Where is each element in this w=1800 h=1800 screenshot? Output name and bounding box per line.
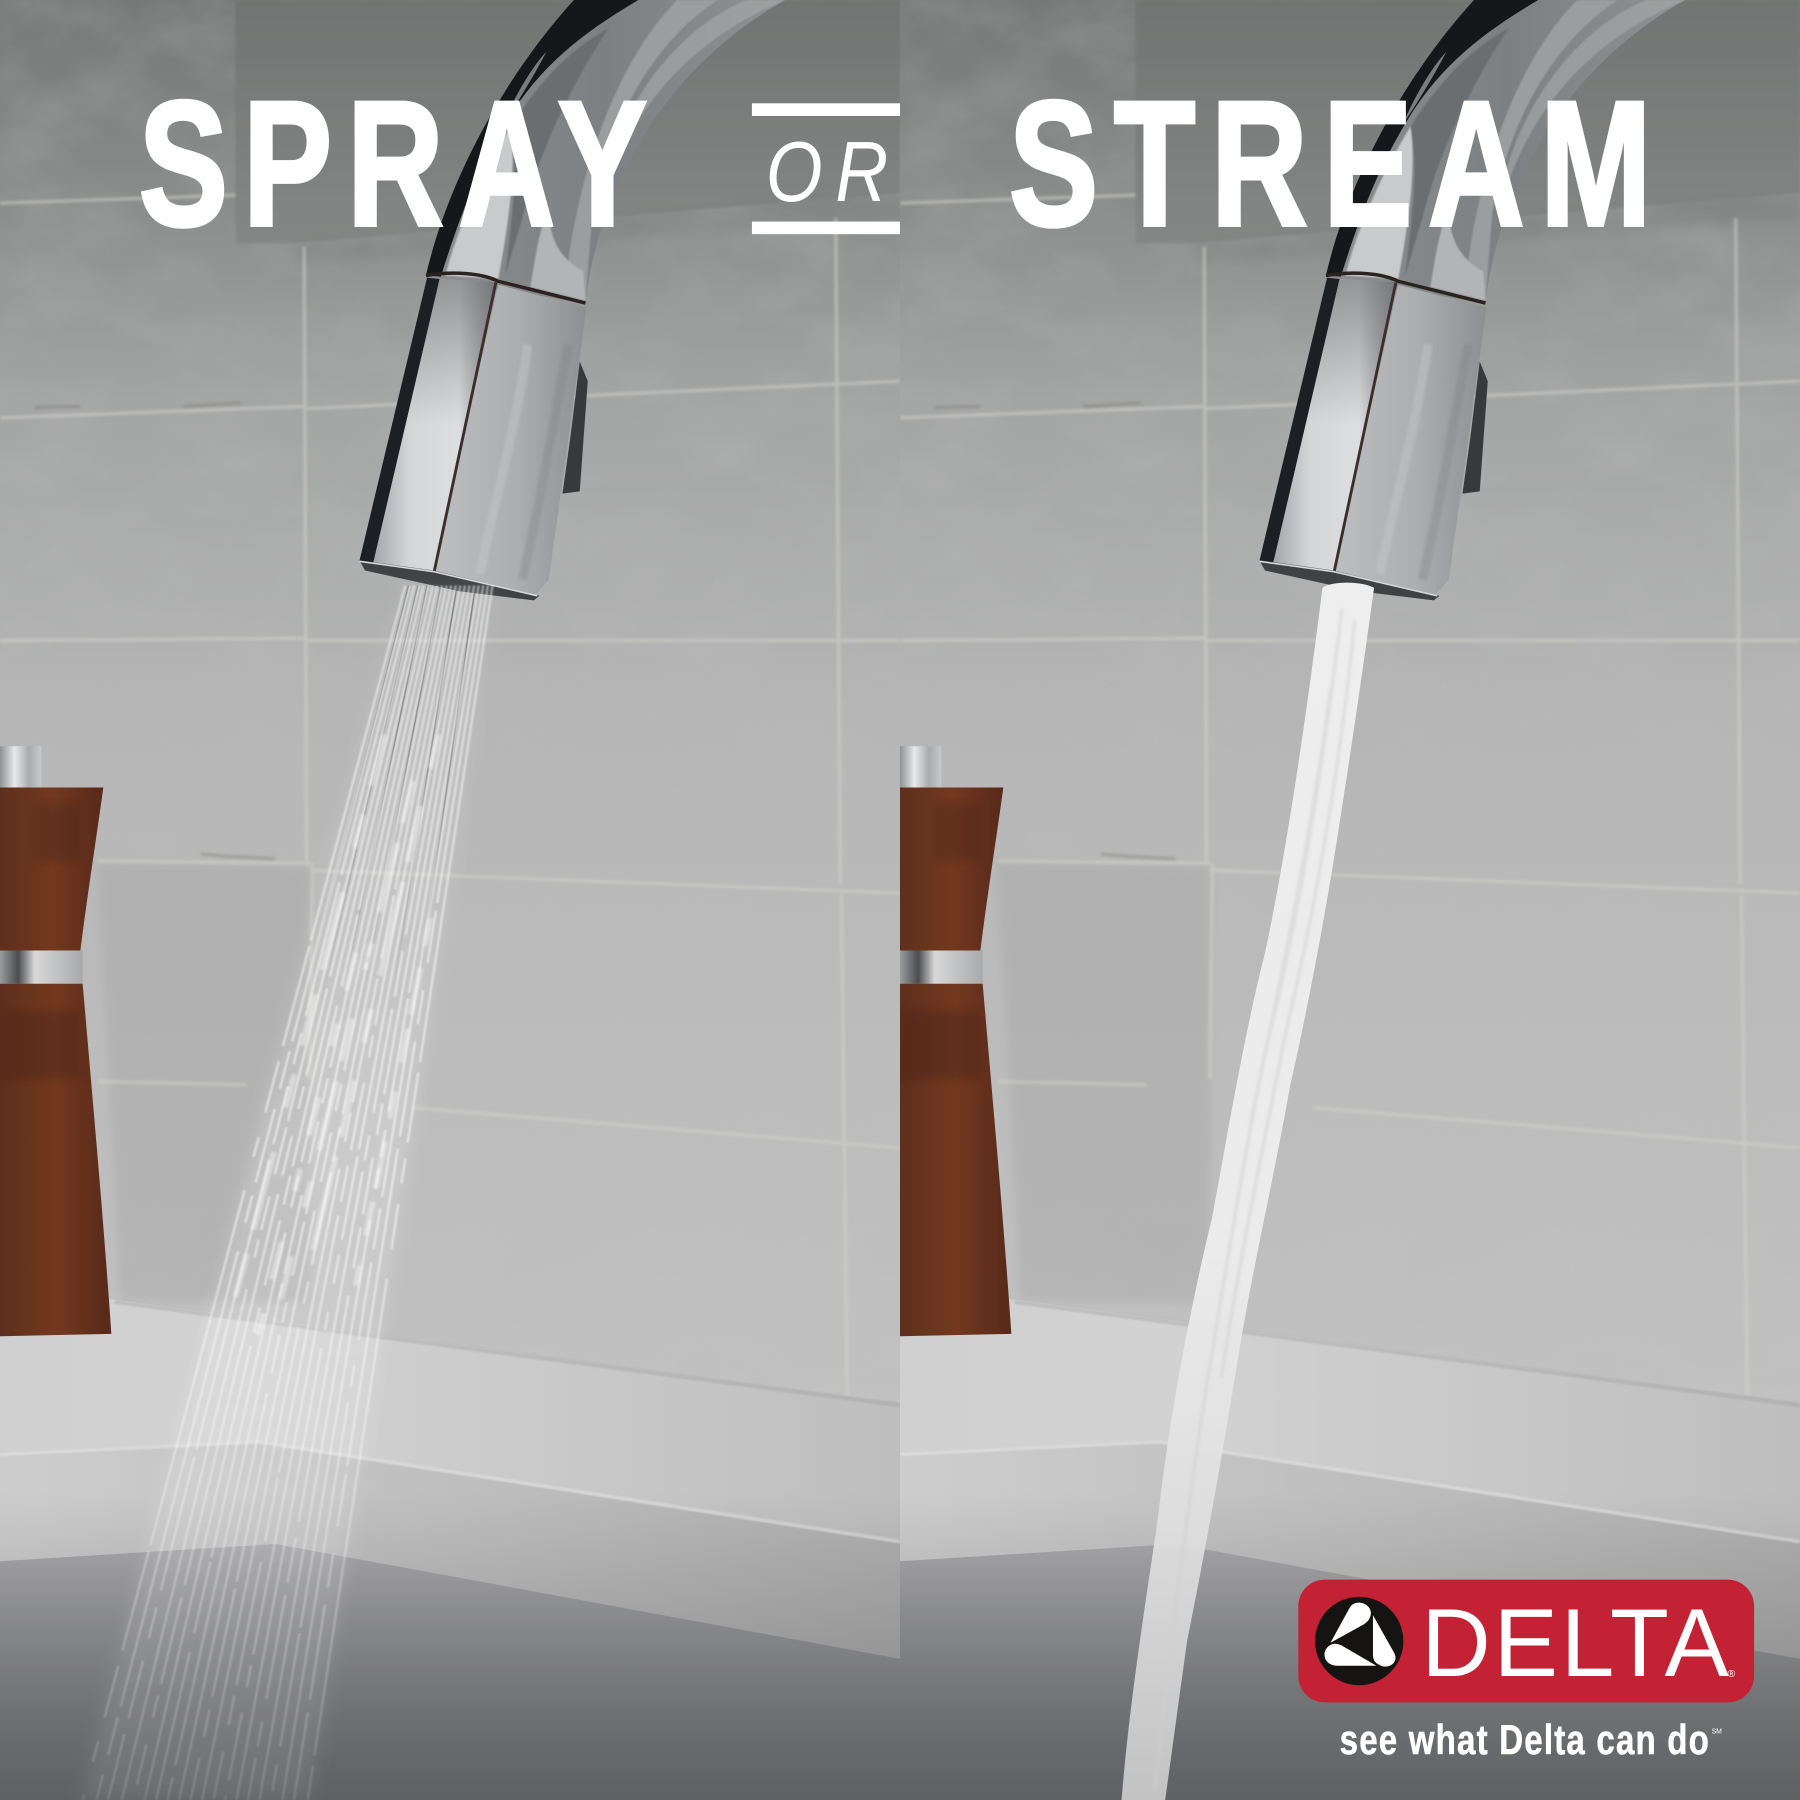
stream of water [1122, 583, 1374, 1800]
icon: delta triangle mark [1315, 1597, 1403, 1685]
Delta logo badge [1298, 1580, 1754, 1702]
panel: spray [0, 0, 900, 1800]
countertop and sink basin [900, 1299, 1800, 1800]
faucet spout and spray head [359, 0, 785, 600]
pepper mill [0, 746, 111, 1336]
wordmark: DELTA: DELTA [1421, 1590, 1730, 1697]
tiled wall background [900, 0, 1800, 1423]
panel: stream [900, 0, 1800, 1800]
tagline: see what Delta can do [1340, 1717, 1709, 1763]
heading: STREAM: STREAM [1009, 65, 1651, 263]
OR divider with rules [752, 103, 900, 234]
spray water strands [80, 583, 496, 1800]
tagline: SM [1712, 1728, 1722, 1735]
tiled wall background [0, 0, 900, 1423]
heading: SPRAY: SPRAY [139, 65, 647, 263]
OR divider with rules: OR [766, 124, 888, 219]
countertop and sink basin [0, 1299, 900, 1800]
pepper mill [900, 746, 1011, 1336]
faucet spout and spray head [1259, 0, 1685, 600]
registered mark: ® [1728, 1669, 1736, 1680]
